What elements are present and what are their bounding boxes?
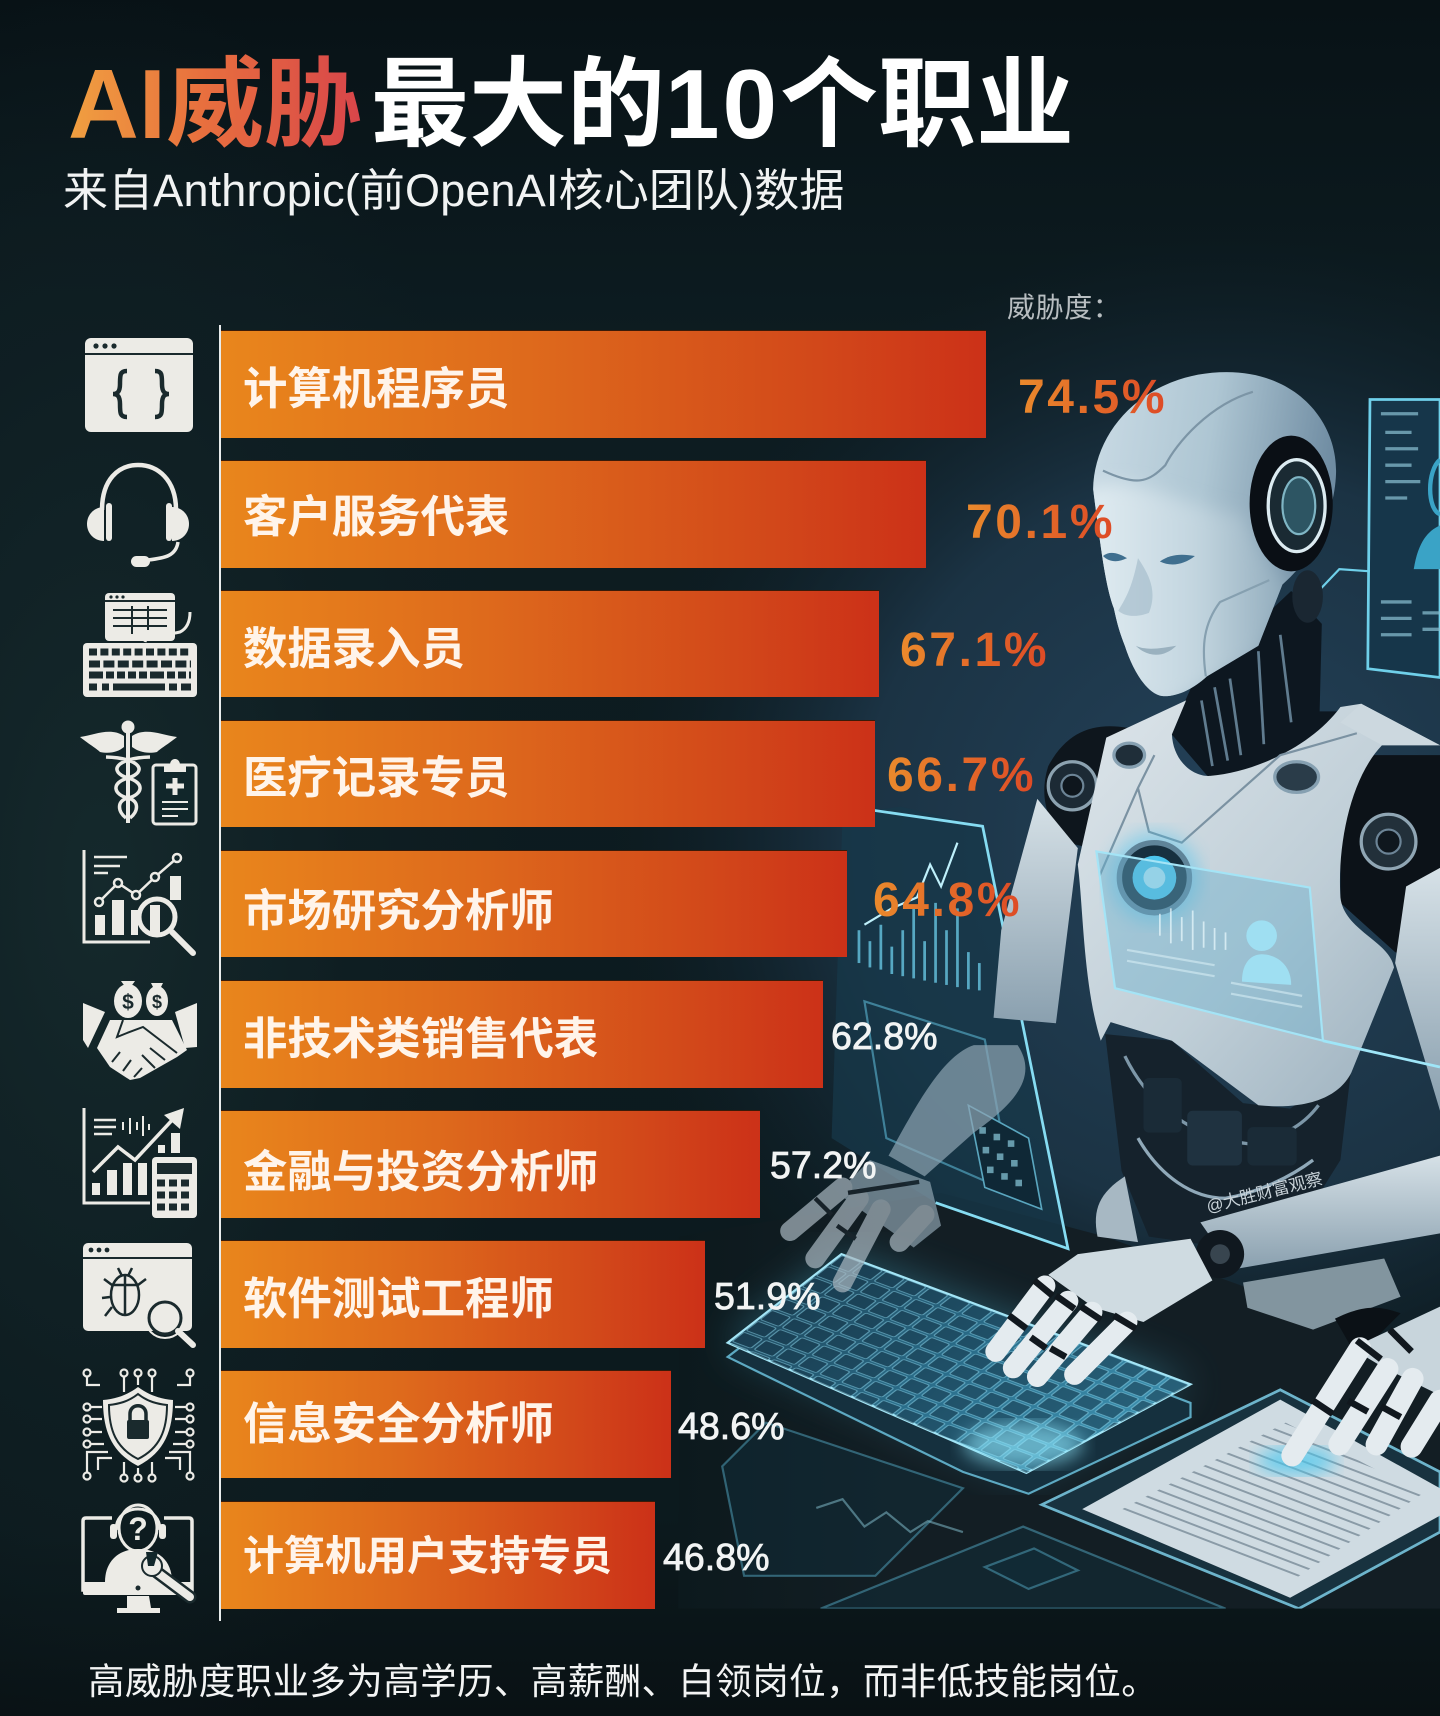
- subtitle: 来自Anthropic(前OpenAI核心团队)数据: [63, 165, 845, 216]
- title: AI威胁最大的10个职业: [68, 49, 1074, 159]
- robot abdomen: [1096, 1034, 1351, 1248]
- robot typing hand: [996, 1239, 1212, 1377]
- glass keyboard: [728, 1254, 1191, 1494]
- icon: user support monitor: [83, 1505, 192, 1613]
- holographic chest panel: [1096, 851, 1440, 1067]
- icon: handshake with money bags: [83, 981, 197, 1080]
- illustration backdrop: [710, 330, 1440, 1334]
- value: 67.1%: 67.1%: [900, 624, 1049, 677]
- clipboard and paper document: [1042, 1390, 1440, 1609]
- value: 46.8%: 46.8%: [663, 1536, 770, 1578]
- bar: 非技术类销售代表: 非技术类销售代表: [243, 1015, 598, 1064]
- bar: 数据录入员: [221, 591, 879, 697]
- bar: 信息安全分析师: 信息安全分析师: [243, 1400, 554, 1449]
- robot right shoulder joint: [1340, 755, 1440, 1111]
- bar: 软件测试工程师: 软件测试工程师: [243, 1275, 554, 1324]
- bar: 客户服务代表: 客户服务代表: [243, 493, 509, 542]
- bar: 软件测试工程师: [221, 1241, 705, 1348]
- robot head: [1083, 372, 1336, 711]
- bar: 计算机程序员: 计算机程序员: [243, 365, 509, 414]
- robot ear module: [1250, 436, 1333, 571]
- legend heading: 威胁度：: [1007, 292, 1121, 323]
- bar: 医疗记录专员: [221, 721, 875, 827]
- bar: 市场研究分析师: [221, 851, 847, 957]
- translucent arm and hand: [790, 1045, 1025, 1283]
- value: 62.8%: 62.8%: [831, 1015, 938, 1057]
- icon: bug in window with magnifier: [83, 1243, 193, 1345]
- value: 48.6%: 48.6%: [678, 1405, 785, 1447]
- icon: handshake with money bags: $: [152, 992, 162, 1012]
- icon: user support monitor: ?: [128, 1511, 148, 1547]
- axis line: [218, 325, 220, 1621]
- robot neck: [1171, 570, 1340, 779]
- icon: handshake with money bags: $: [122, 991, 134, 1014]
- bar: 信息安全分析师: [221, 1371, 671, 1478]
- bar: 计算机程序员: [221, 331, 986, 438]
- icon: caduceus and clipboard: [80, 720, 196, 824]
- translucent tablet with chart: [832, 807, 1068, 1249]
- bar: 数据录入员: 数据录入员: [243, 625, 465, 674]
- watermark: @大胜财富观察: [1204, 1169, 1324, 1216]
- holographic side screen: [1319, 400, 1440, 677]
- icon: data entry keyboard: [83, 593, 197, 697]
- icon: code window: [85, 338, 193, 432]
- robot left shoulder and arm: [994, 726, 1127, 1023]
- icon: security shield with circuit: [84, 1370, 194, 1482]
- bar: 客户服务代表: [221, 461, 926, 568]
- icon: market analysis chart with magnifier: [84, 850, 193, 953]
- desk surface: [814, 1204, 1440, 1608]
- icon: financial chart with calculator: [84, 1108, 197, 1218]
- bar: 金融与投资分析师: [221, 1111, 760, 1218]
- chest core light: [1108, 832, 1200, 924]
- bar: 计算机用户支持专员: [221, 1502, 655, 1609]
- bar: 医疗记录专员: 医疗记录专员: [243, 754, 509, 803]
- desk glass panels: [722, 1423, 1226, 1609]
- robot forearm: [1196, 1156, 1440, 1357]
- footer note: 高威胁度职业多为高学历、高薪酬、白领岗位，而非低技能岗位。: [88, 1661, 1158, 1702]
- icon: headset: [87, 465, 189, 567]
- value: 66.7%: 66.7%: [887, 749, 1036, 802]
- robot document hand: [1292, 1307, 1440, 1455]
- value: 51.9%: 51.9%: [714, 1275, 821, 1317]
- bar: 市场研究分析师: 市场研究分析师: [243, 887, 554, 936]
- robot chest plate: [1078, 700, 1440, 1106]
- value: 57.2%: 57.2%: [770, 1144, 877, 1186]
- bar: 金融与投资分析师: 金融与投资分析师: [243, 1148, 598, 1197]
- bar: 计算机用户支持专员: 计算机用户支持专员: [243, 1533, 612, 1579]
- value: 74.5%: 74.5%: [1018, 371, 1167, 424]
- value: 64.8%: 64.8%: [873, 874, 1022, 927]
- bar: 非技术类销售代表: [221, 981, 823, 1088]
- value: 70.1%: 70.1%: [966, 496, 1115, 549]
- illustration: robot working at glass keyboard: [710, 330, 1440, 1609]
